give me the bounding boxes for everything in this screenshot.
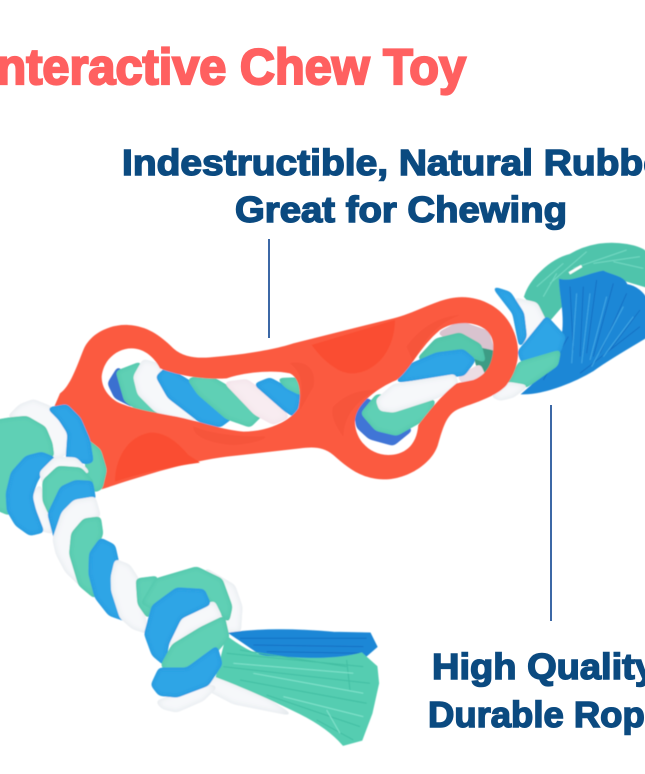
callout: durable rope: High Quality: [432, 646, 645, 687]
callout: natural rubber: Great for Chewing: [235, 189, 567, 230]
bone grip patch: bottom: [115, 433, 200, 482]
callout: durable rope: [428, 646, 645, 735]
callout: natural rubber: [122, 142, 645, 230]
rope and knot: left end: [0, 400, 378, 745]
product: chew toy: [0, 244, 645, 745]
callout line: rubber: [268, 239, 270, 338]
rope tuft: right end: [492, 244, 645, 400]
tassel: teal: [217, 637, 378, 745]
callout: natural rubber: Indestructible, Natural Rubber: [122, 142, 645, 183]
tassel: blue: [230, 630, 377, 658]
rubber bone: [50, 297, 518, 489]
bone grip patch: top: [312, 320, 395, 373]
callout line: rope: [550, 405, 552, 621]
rope inside bone holes: [108, 322, 495, 445]
bone shadows: [193, 315, 460, 445]
